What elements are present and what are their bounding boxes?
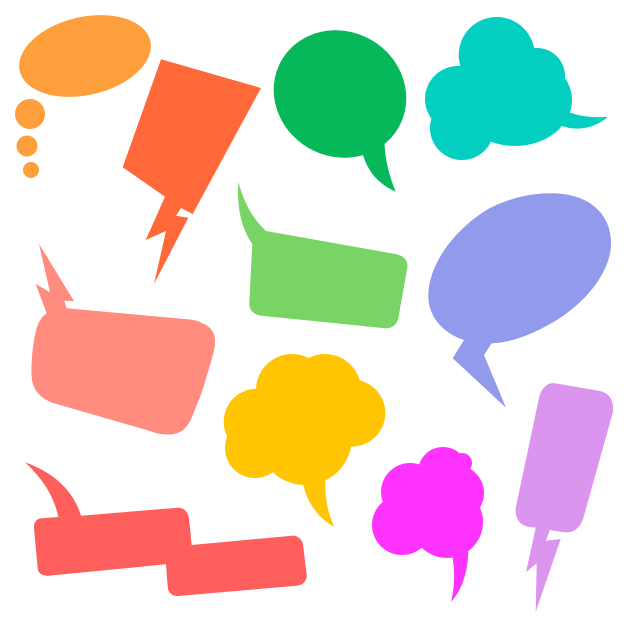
yellow cloud bubble: [224, 354, 385, 527]
red double rectangular bubble: [25, 462, 307, 596]
orange thought bubble: [11, 3, 159, 178]
light green rectangular bubble: [238, 182, 407, 328]
lilac tall bubble: [516, 383, 613, 612]
green round bubble: [250, 6, 430, 192]
teal cloud bubble: [425, 17, 608, 160]
orange-red angular bubble: [123, 59, 261, 284]
salmon rectangular bubble: [31, 244, 215, 435]
periwinkle oval bubble: [428, 193, 611, 408]
magenta cloud bubble: [372, 447, 484, 602]
